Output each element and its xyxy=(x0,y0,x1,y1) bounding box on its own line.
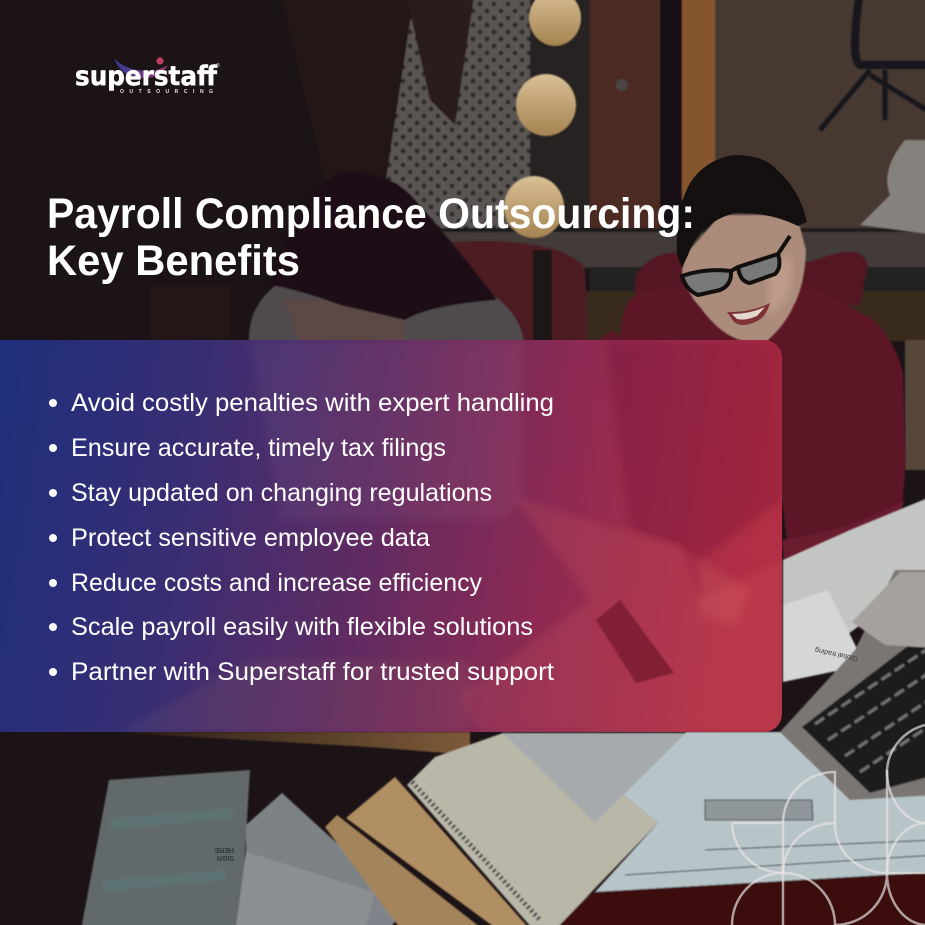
phone on desk xyxy=(596,600,674,683)
spiral notebook xyxy=(407,757,658,925)
bullet 6: Scale payroll easily with flexible solutions xyxy=(71,613,533,641)
envelopes xyxy=(325,815,490,925)
logo xyxy=(75,57,220,95)
title line 2: Key Benefits xyxy=(47,237,300,285)
logo dot xyxy=(156,57,164,65)
smiling woman xyxy=(600,155,905,582)
bullet 4: Protect sensitive employee data xyxy=(71,524,430,552)
blueprint sheet xyxy=(595,732,925,892)
glasses xyxy=(682,236,790,295)
cheek highlight xyxy=(768,255,792,318)
dress xyxy=(600,280,905,582)
translucent gradient panel xyxy=(0,340,782,732)
title line 1: Payroll Compliance Outsourcing: xyxy=(47,190,695,238)
bullet 7: Partner with Superstaff for trusted support xyxy=(71,658,554,686)
title xyxy=(47,190,695,285)
desk folder xyxy=(120,732,470,755)
bullet 5: Reduce costs and increase efficiency xyxy=(71,569,482,597)
bullet list xyxy=(49,389,554,686)
bullet 1: Avoid costly penalties with expert handling xyxy=(71,389,554,417)
pendant lamps xyxy=(504,0,581,238)
logo subtitle: OUTSOURCING xyxy=(120,89,213,95)
grey sheet on notebook xyxy=(503,733,686,823)
smile xyxy=(727,303,770,325)
hair xyxy=(677,155,807,268)
registered mark: ® xyxy=(216,62,220,69)
bullet 3: Stay updated on changing regulations xyxy=(71,479,492,507)
paper label: Global trading xyxy=(814,646,859,662)
upper room backdrop xyxy=(280,0,925,470)
paperwork on desk xyxy=(80,732,925,925)
red chairs xyxy=(150,241,868,341)
sign here document xyxy=(80,770,250,925)
upside-down document labels: SIGN xyxy=(217,854,234,861)
seated colleague xyxy=(249,172,524,341)
upside-down document labels xyxy=(214,846,234,861)
logo swoosh xyxy=(114,58,168,78)
sleeve cuff xyxy=(782,500,905,582)
upside-down document labels: HERE xyxy=(214,846,234,853)
decorative outline logo pattern xyxy=(732,725,925,925)
face xyxy=(682,215,806,341)
bullet 2: Ensure accurate, timely tax filings xyxy=(71,434,446,462)
loose sheets xyxy=(246,793,397,898)
logo wordmark: superstaff xyxy=(75,61,218,92)
papers right side and laptop xyxy=(780,495,925,800)
office chair and window objects xyxy=(820,0,925,235)
photo showing through the panel xyxy=(120,340,782,732)
